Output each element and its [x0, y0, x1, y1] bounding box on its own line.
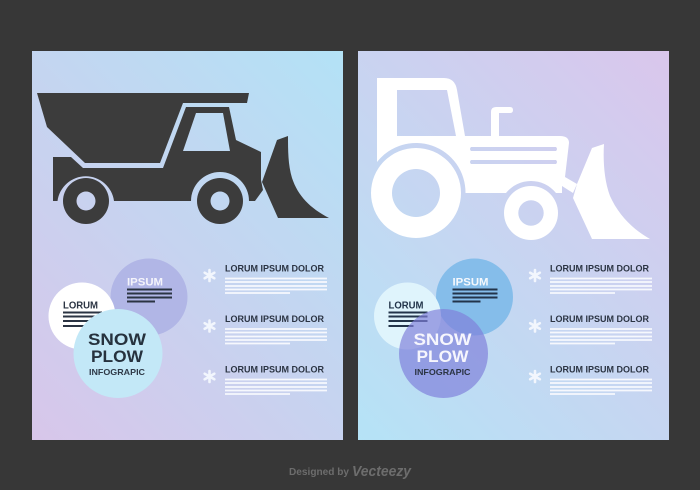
- circle: snow plow title: INFOGRAPIC: [89, 367, 145, 377]
- circle: ipsum: [436, 258, 513, 336]
- panel background right: [358, 51, 669, 440]
- circle: lorum: [374, 282, 441, 350]
- circle: lorum: LORUM: [388, 300, 424, 312]
- icon: tractor snow plow: [371, 78, 650, 240]
- circle: ipsum: IPSUM: [452, 276, 488, 288]
- footer credit: Vecteezy: [352, 463, 412, 480]
- icon: dump truck snow plow: [37, 93, 329, 224]
- circle: snow plow title: [399, 309, 488, 398]
- circle: ipsum: IPSUM: [127, 276, 163, 288]
- list item 3 left: LORUM IPSUM DOLOR: [225, 364, 324, 374]
- list item 2 right: LORUM IPSUM DOLOR: [550, 314, 649, 324]
- footer credit: [289, 463, 412, 480]
- list item 3 left: [205, 364, 327, 394]
- list item 3 right: LORUM IPSUM DOLOR: [550, 364, 649, 374]
- panel background left: [32, 51, 343, 440]
- panel: right flyer: [358, 51, 669, 440]
- circle: snow plow title: PLOW: [91, 347, 144, 366]
- circle: ipsum: [110, 258, 188, 336]
- list item 2 right: [530, 314, 652, 344]
- list item 2 left: [205, 314, 327, 344]
- circle: snow plow title: INFOGRAPIC: [414, 367, 470, 377]
- circle: lorum: LORUM: [63, 300, 98, 312]
- circle: snow plow title: [74, 309, 162, 398]
- list item 1 left: LORUM IPSUM DOLOR: [225, 264, 324, 274]
- circle: snow plow title: SNOW: [414, 330, 473, 349]
- list item 1 right: LORUM IPSUM DOLOR: [550, 264, 649, 274]
- footer credit: Designed by: [289, 466, 349, 478]
- circle: snow plow title: SNOW: [88, 330, 147, 349]
- circle: snow plow title: PLOW: [416, 347, 469, 366]
- list item 1 right: [530, 264, 652, 293]
- panel: left flyer: [32, 51, 343, 440]
- list item 2 left: LORUM IPSUM DOLOR: [225, 314, 324, 324]
- list item 1 left: [205, 264, 327, 293]
- list item 3 right: [530, 364, 652, 394]
- circle: lorum: [48, 282, 116, 350]
